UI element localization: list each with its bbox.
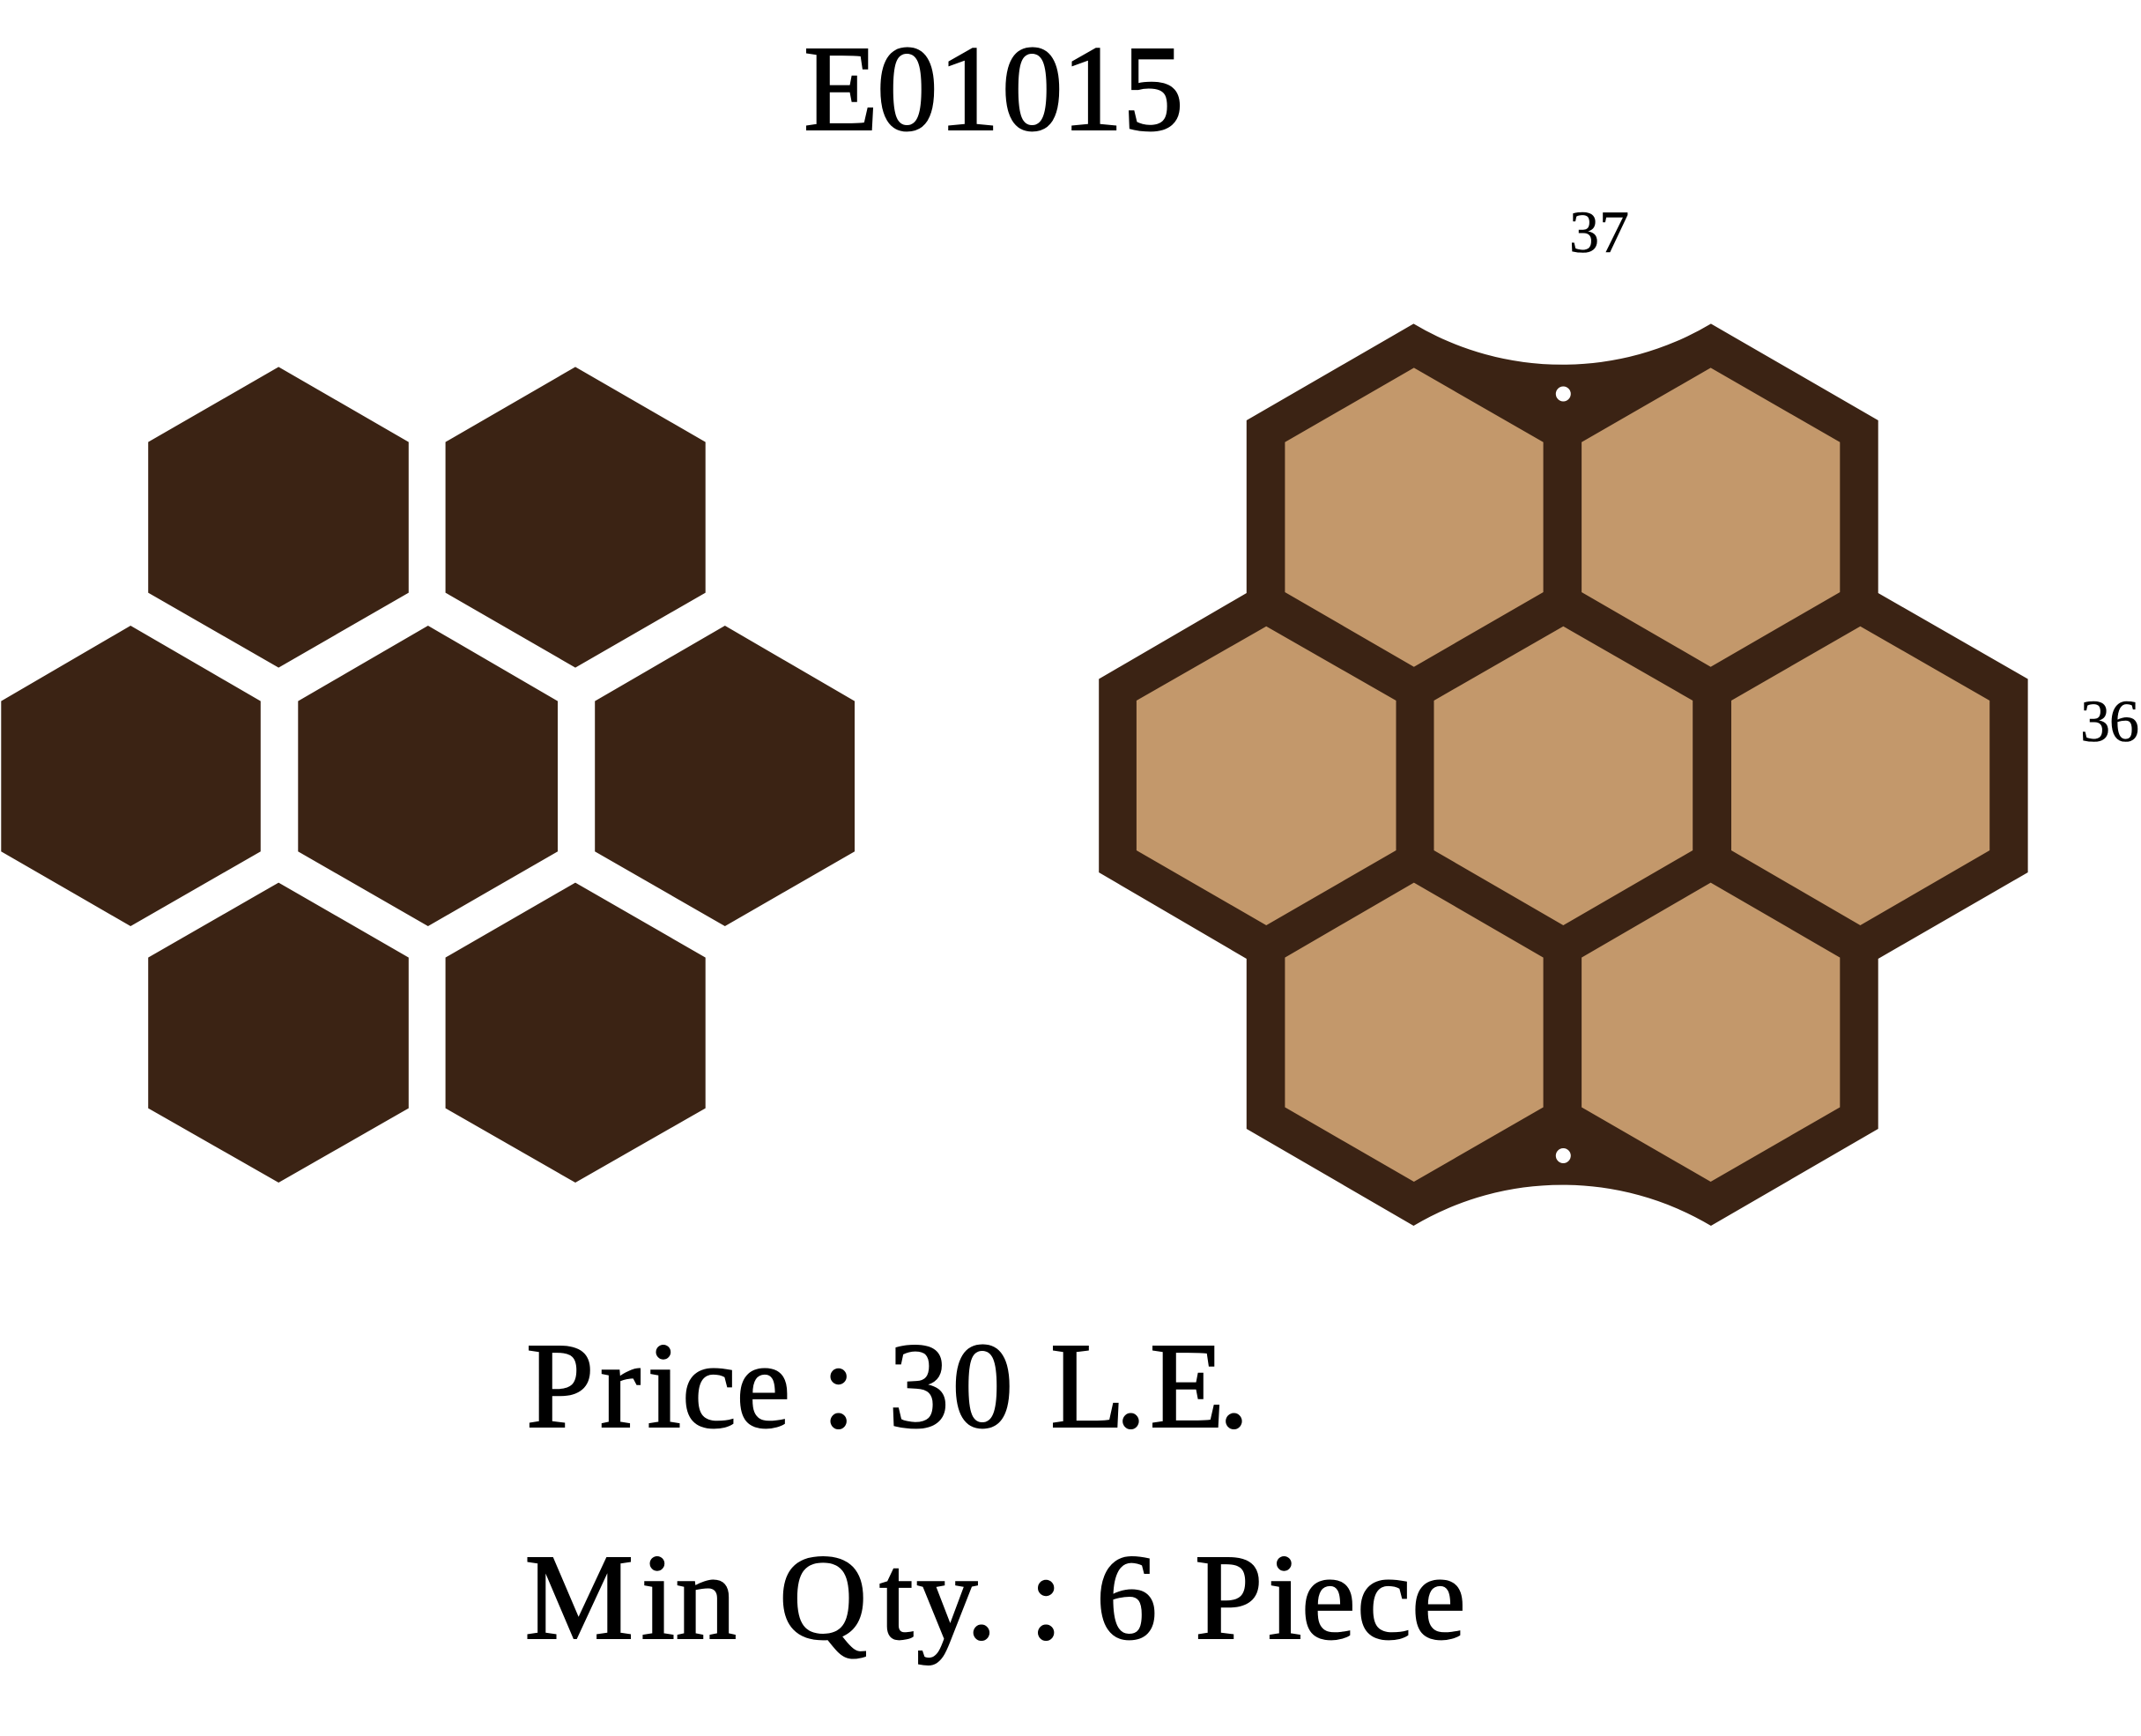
frame: dark outer silhouette with arched notches (1099, 323, 2028, 1226)
hexagon: middle centre (298, 626, 558, 926)
dimension label: height 36: 36 (2080, 687, 2139, 754)
cell: middle right (1731, 627, 1989, 925)
left panel: seven loose dark hexagons (1, 367, 855, 1183)
right panel: honeycomb frame with tan cells (1099, 323, 2028, 1226)
title: product code: E01015 (804, 21, 1184, 157)
dimension label: width 37: 37 (1569, 198, 1629, 265)
mounting hole: bottom (1556, 1148, 1571, 1163)
hexagon: top left (148, 367, 409, 668)
mounting hole: top (1556, 386, 1571, 402)
cell: top left (1285, 367, 1544, 667)
hexagon: top right (446, 367, 706, 668)
cell: bottom right (1582, 883, 1840, 1182)
text block: price: Price : 30 L.E. (526, 1318, 1249, 1454)
cells: seven tan hexagons (1137, 367, 1989, 1182)
hexagon: middle right (595, 626, 855, 926)
cell: middle centre (1434, 627, 1693, 925)
hexagon: bottom right (446, 883, 706, 1183)
cell: bottom left (1285, 883, 1544, 1182)
hexagon: middle left (1, 626, 261, 926)
cell: middle left (1137, 627, 1396, 925)
hexagon: bottom left (148, 883, 409, 1183)
text block: minimum quantity: Min Qty. : 6 Piece (525, 1530, 1466, 1666)
cell: top right (1582, 367, 1840, 667)
